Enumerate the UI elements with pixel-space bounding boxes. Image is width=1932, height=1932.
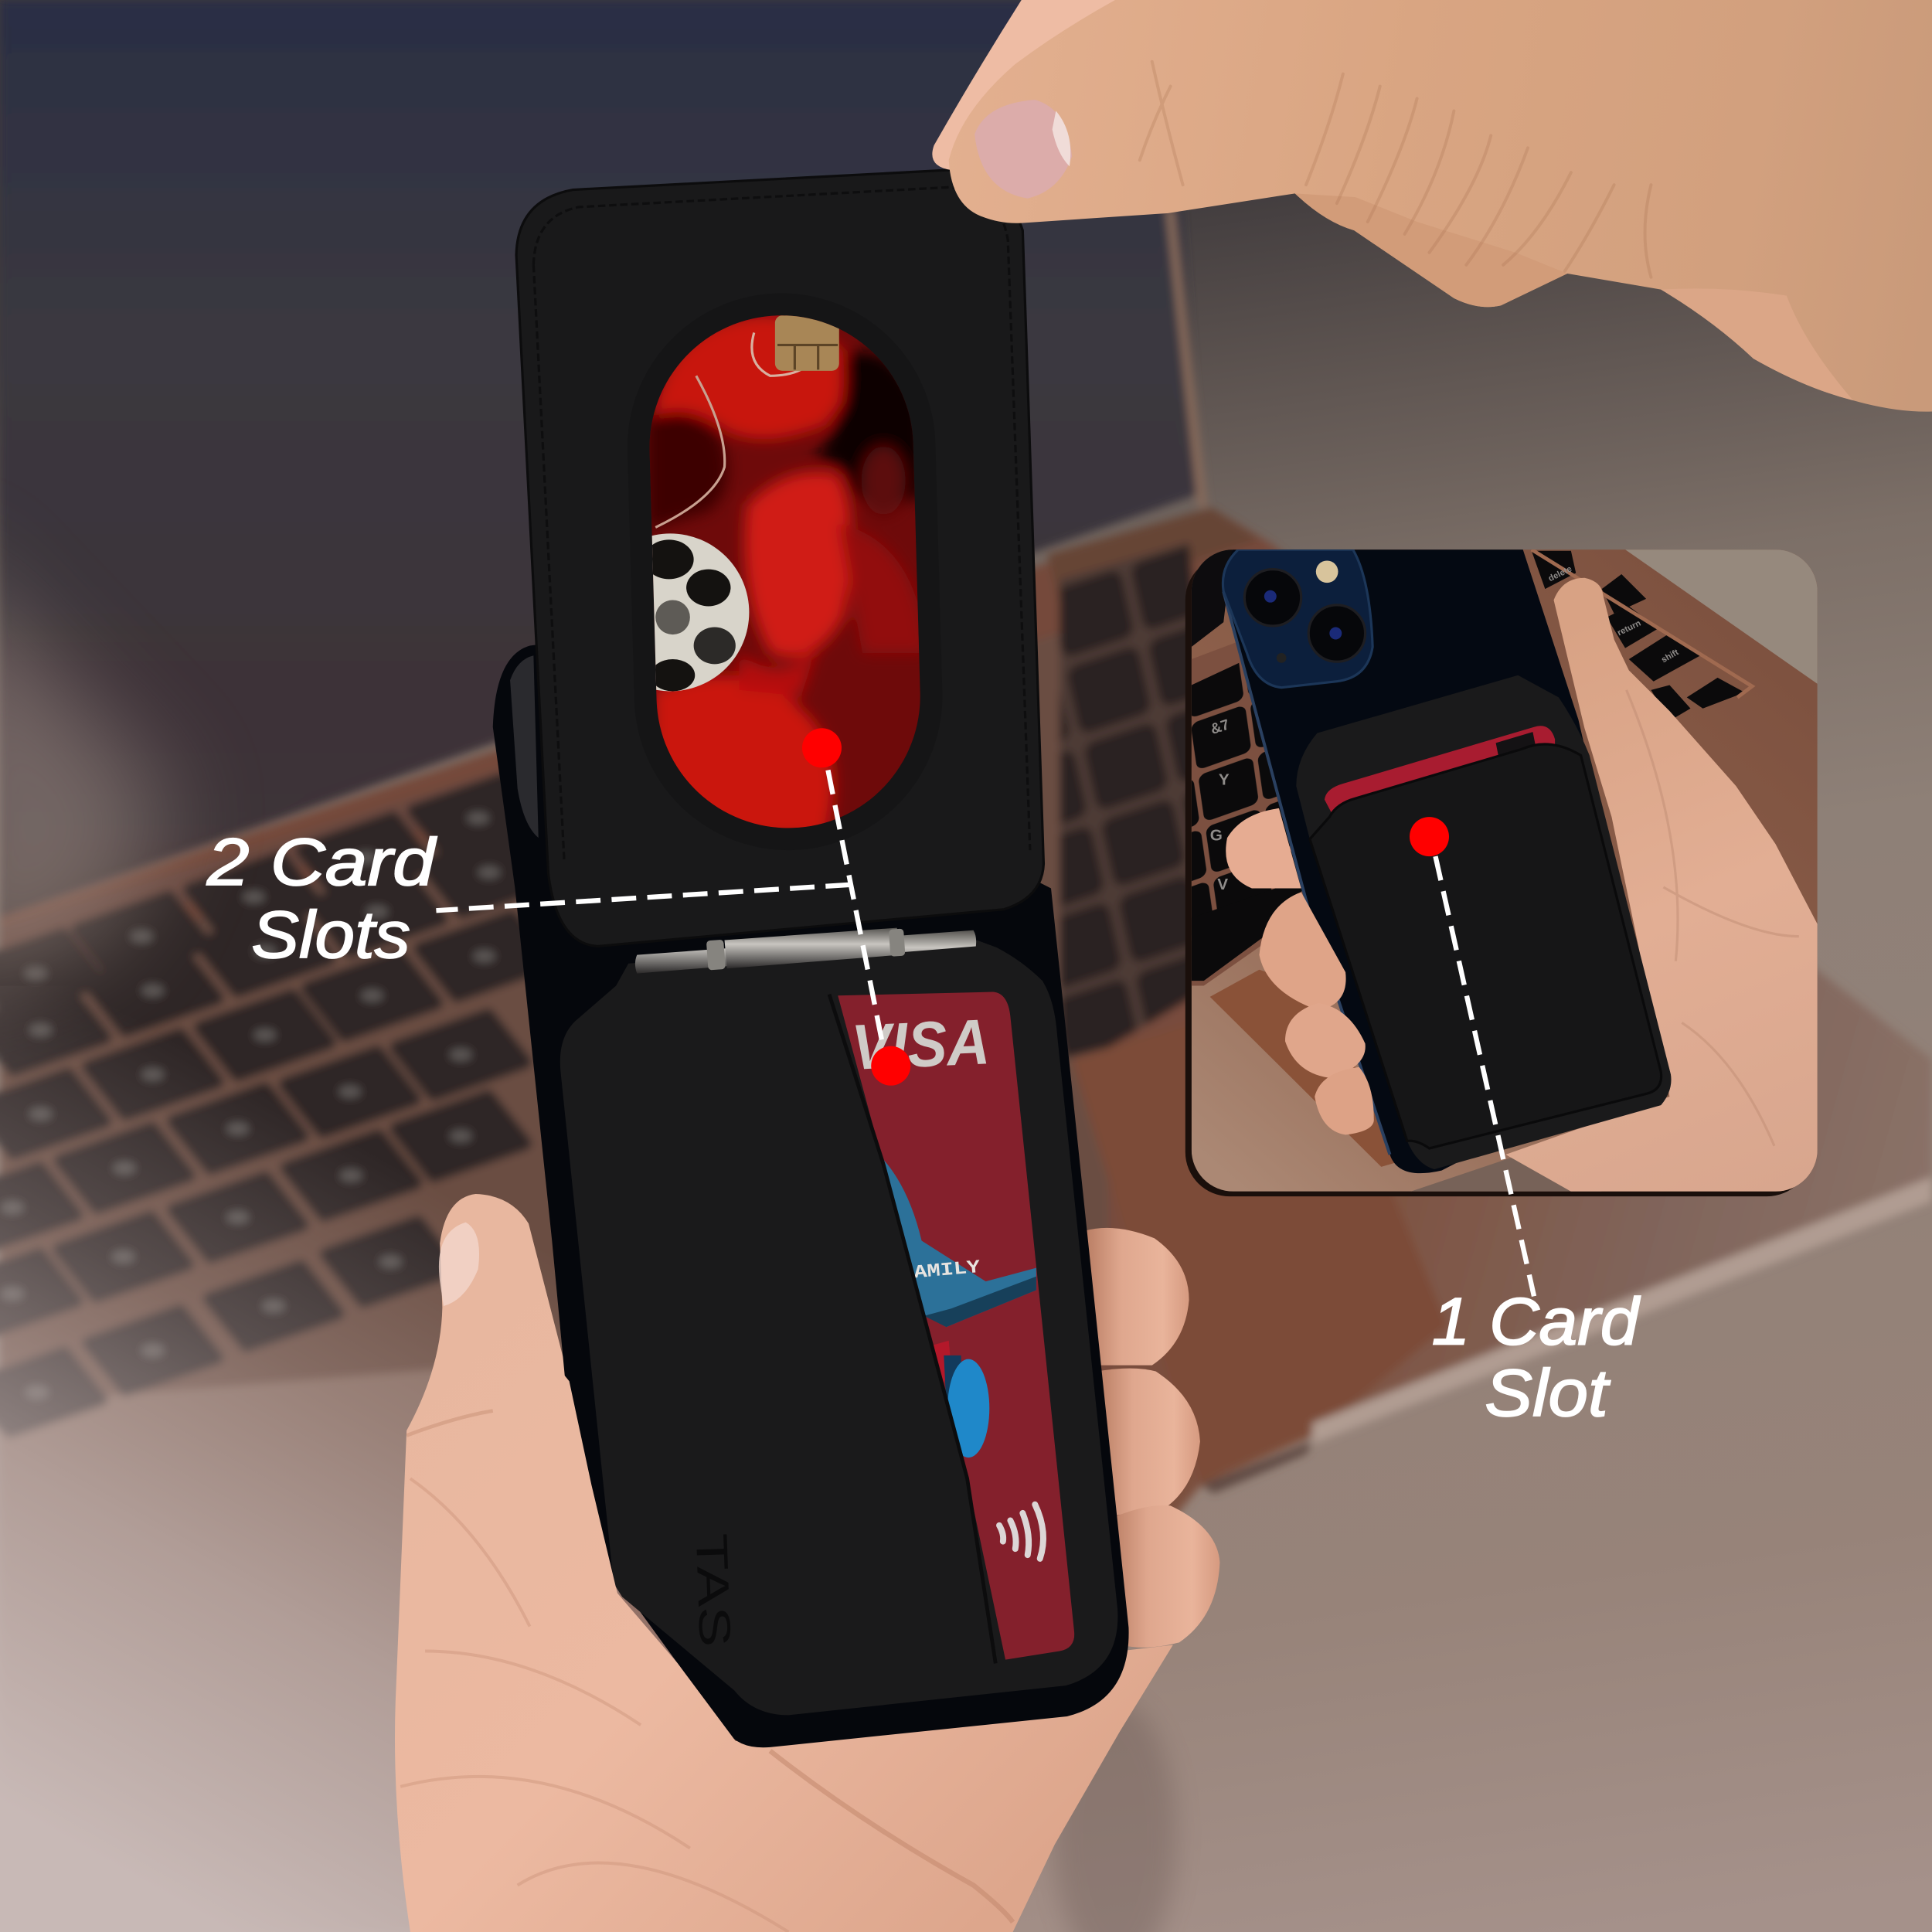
key labels: [1209, 564, 1681, 893]
lower hand holding the phone: [395, 1194, 1219, 1932]
chip: [775, 315, 839, 371]
lower palm fold: [1661, 288, 1853, 400]
inset fingers: [1226, 808, 1301, 889]
palm overlapping phone corner: [400, 1223, 1013, 1932]
card text: AMILY: [913, 1257, 981, 1284]
callout: 2 card slots leader lines and markers: [206, 728, 910, 1086]
fingers: [1084, 1228, 1189, 1366]
inset trackpad: [1210, 970, 1411, 1167]
wood desk corner: [1625, 549, 1818, 684]
card seen through window: [649, 315, 920, 828]
index finger behind thumb: [932, 0, 1146, 170]
TAS logo: TAS: [686, 1532, 740, 1648]
keyboard keys left: [0, 779, 553, 1432]
key labels: shift: [1660, 648, 1681, 665]
VISA logo: VISA: [850, 1005, 992, 1083]
thumb nail highlight: [439, 1223, 479, 1306]
dark laptop screen corner: [1192, 549, 1232, 647]
lower-left fade: [0, 986, 690, 1932]
laptop screen: [0, 0, 1202, 918]
inset wallet front pocket: [1310, 744, 1662, 1148]
inset camera module: [1223, 549, 1372, 688]
left edge haze: [0, 543, 172, 1010]
key labels: G: [1210, 826, 1223, 844]
callout: 1 card slot leader line and marker: [1410, 817, 1641, 1430]
laptop base: [0, 508, 1932, 1932]
upper flap wallet: [516, 170, 1043, 946]
thumb and back of hand: [949, 0, 1932, 412]
inset wallet: [1296, 675, 1672, 1169]
inset hand: [1505, 578, 1818, 1192]
trackpad: [1072, 986, 1447, 1485]
hinge strip: [0, 770, 518, 961]
inset phone: [1223, 549, 1657, 1173]
inset photo panel: [1185, 549, 1818, 1196]
upper hand with thumb gripping flap: [932, 0, 1932, 412]
palm creases: [1627, 690, 1799, 1146]
key labels: delete: [1547, 564, 1573, 583]
phone body: [493, 641, 1129, 1747]
palm creases: [770, 1751, 1013, 1922]
key labels: return: [1616, 618, 1642, 638]
hinge: [635, 928, 976, 974]
contactless icon: [999, 1505, 1043, 1559]
keyboard keys right: [1056, 542, 1196, 1060]
label: 1 Card Slot: Slot: [1485, 1356, 1611, 1430]
inset red card: [1325, 726, 1555, 823]
stitching: [533, 187, 1030, 850]
lower wallet: [560, 939, 1117, 1715]
palm and thumb: [395, 1194, 1173, 1932]
film reel: [591, 533, 749, 691]
label: 2 Card Slots: Slots: [251, 898, 410, 972]
right keys: [1532, 551, 1745, 721]
key labels: V: [1217, 876, 1228, 893]
key labels: &7: [1209, 716, 1232, 738]
swirl lines: [655, 376, 725, 527]
folded finger underside: [1295, 193, 1567, 307]
card in slot: [825, 986, 1084, 1663]
window recess: [623, 289, 947, 855]
inset bottom wood strip: [1411, 1152, 1602, 1192]
label: 2 Card Slots: 2 Card: [206, 825, 437, 900]
pocket edge: [829, 995, 995, 1663]
inset keyboard: [1192, 634, 1318, 986]
thumbnail: [975, 100, 1072, 199]
plane graphic: [884, 1161, 1036, 1327]
knuckle and skin wrinkles: [1140, 62, 1651, 277]
label: 1 Card Slot: 1 Card: [1432, 1284, 1641, 1359]
side rail: [510, 655, 539, 838]
dark shadow beside lower hand: [1053, 1700, 1177, 1932]
base lip: [1312, 1177, 1932, 1444]
key labels: Y: [1219, 771, 1230, 789]
